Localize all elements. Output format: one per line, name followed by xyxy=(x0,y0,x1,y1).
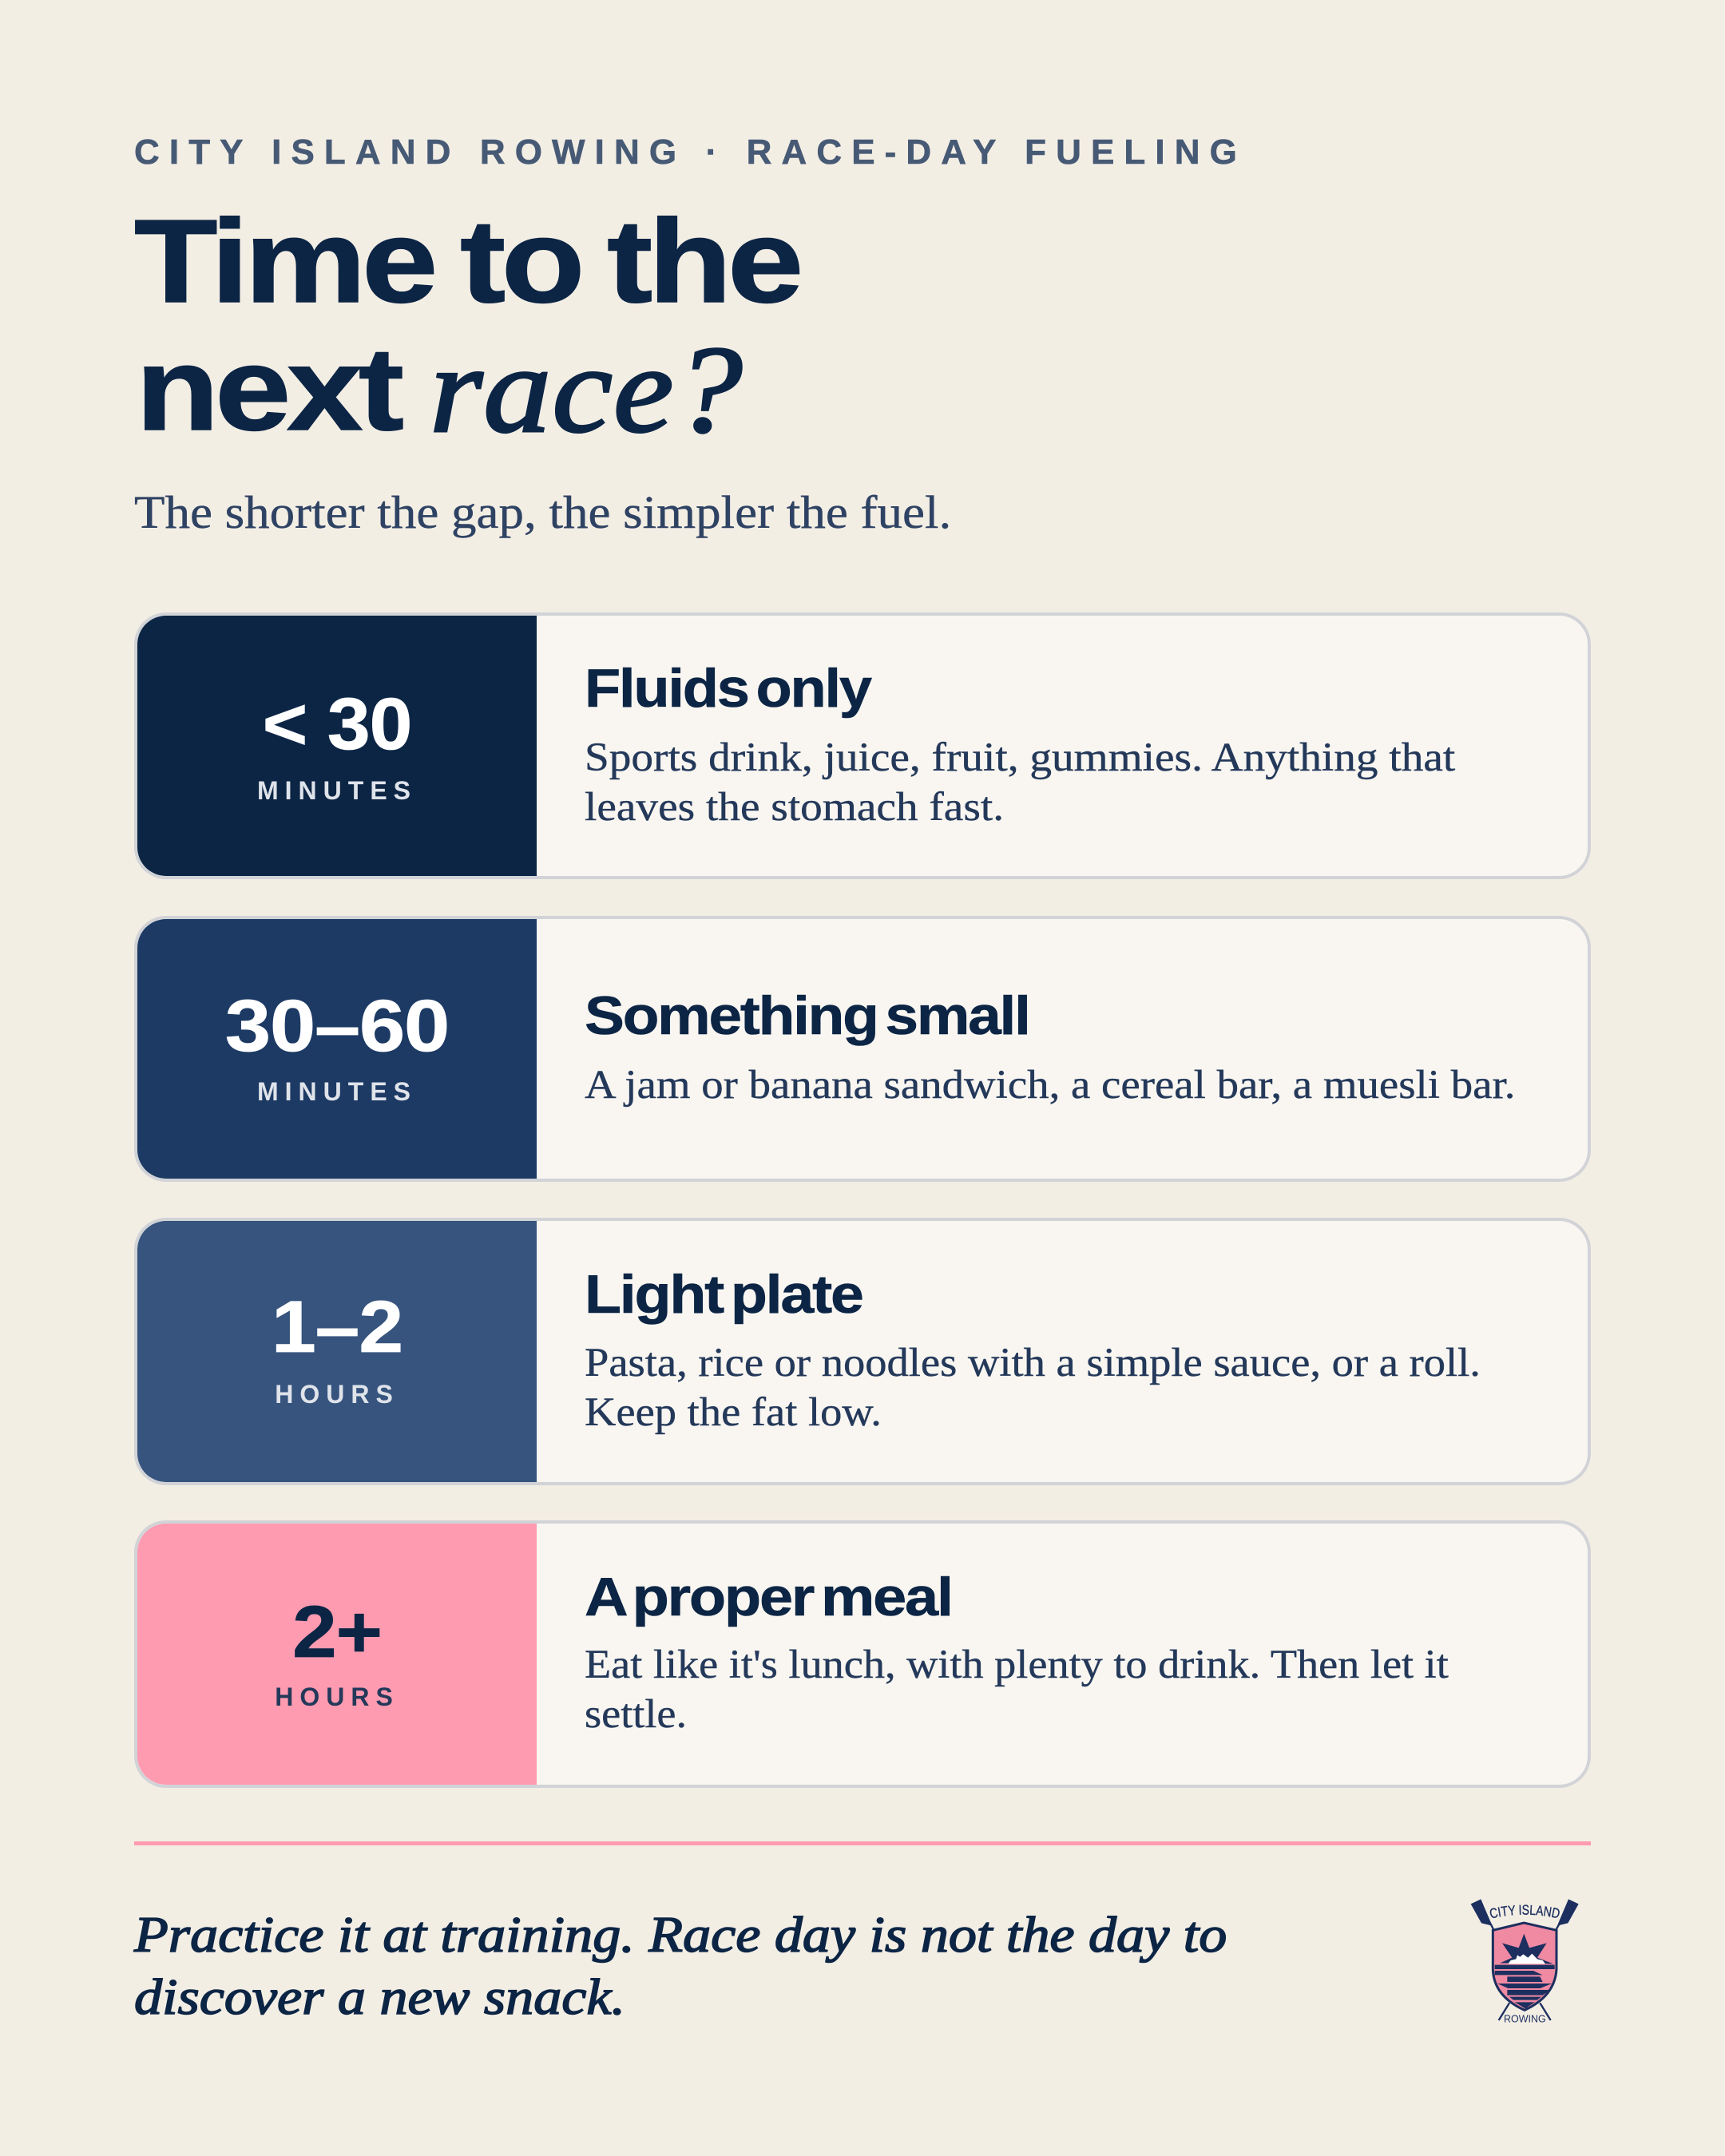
body: fluids only xyxy=(585,735,1455,830)
title: race? xyxy=(430,320,744,458)
icon: club crest logo xyxy=(1471,1899,1579,2025)
heading: light plate: Light plate xyxy=(585,1264,862,1325)
footer note: Practice it at training. Race day is not the day to xyxy=(134,1906,1227,1963)
oars xyxy=(1488,1919,1562,2020)
panel: 1 to 2 hours xyxy=(134,1218,1591,1485)
water bars xyxy=(1495,1965,1555,2008)
panel: under 30 minutes xyxy=(134,612,1591,879)
skyline xyxy=(1508,1954,1545,1964)
time block: under 30 minutes xyxy=(137,616,537,876)
time block: 30 to 60 minutes: 30–60 xyxy=(225,985,449,1067)
footer note: discover a new snack. xyxy=(134,1968,625,2025)
body: a proper meal: Eat like it's lunch, with plenty to drink. Then let it xyxy=(585,1643,1449,1687)
body: a proper meal: settle. xyxy=(585,1692,687,1737)
crest text: CITY ISLAND xyxy=(1490,1904,1560,1918)
body: fluids only: leaves the stomach fast. xyxy=(585,785,1004,830)
shield xyxy=(1493,1923,1556,2010)
time block: 30 to 60 minutes: MINUTES xyxy=(257,1077,417,1106)
time block: under 30 minutes: < 30 xyxy=(263,684,411,765)
body: fluids only: Sports drink, juice, fruit, gummies. Anything that xyxy=(585,735,1455,780)
crown star xyxy=(1500,1934,1553,1964)
body: light plate: Pasta, rice or noodles with a simple sauce, or a roll. xyxy=(585,1341,1481,1385)
heading: something small: Something small xyxy=(585,985,1029,1046)
panel: 2+ hours xyxy=(134,1520,1591,1788)
time block: 1 to 2 hours: 1–2 xyxy=(272,1286,402,1368)
time block: 2+ hours xyxy=(137,1524,537,1785)
time block: under 30 minutes: MINUTES xyxy=(257,776,417,805)
title: Time to the xyxy=(134,196,799,327)
body: light plate: Keep the fat low. xyxy=(585,1390,882,1435)
title xyxy=(134,196,800,458)
time block: 2+ hours: HOURS xyxy=(275,1682,399,1711)
time block: 30 to 60 minutes xyxy=(137,919,537,1179)
body: light plate xyxy=(585,1341,1481,1435)
heading: a proper meal: A proper meal xyxy=(585,1567,952,1627)
time block: 1 to 2 hours xyxy=(137,1221,537,1482)
time block: 1 to 2 hours: HOURS xyxy=(275,1380,399,1409)
panel: 30 to 60 minutes xyxy=(134,916,1591,1182)
time block: 2+ hours: 2+ xyxy=(292,1591,382,1673)
body: a proper meal xyxy=(585,1643,1449,1737)
eyebrow: CITY ISLAND ROWING · RACE-DAY FUELING xyxy=(134,133,1247,172)
subtitle: The shorter the gap, the simpler the fuel. xyxy=(134,486,951,538)
body: something small: A jam or banana sandwich, a cereal bar, a muesli bar. xyxy=(585,1063,1515,1108)
footer note xyxy=(133,1906,1227,2025)
title: next xyxy=(136,323,400,455)
heading: fluids only: Fluids only xyxy=(585,658,870,719)
icon: club crest logo: ROWING xyxy=(1504,2014,1546,2025)
